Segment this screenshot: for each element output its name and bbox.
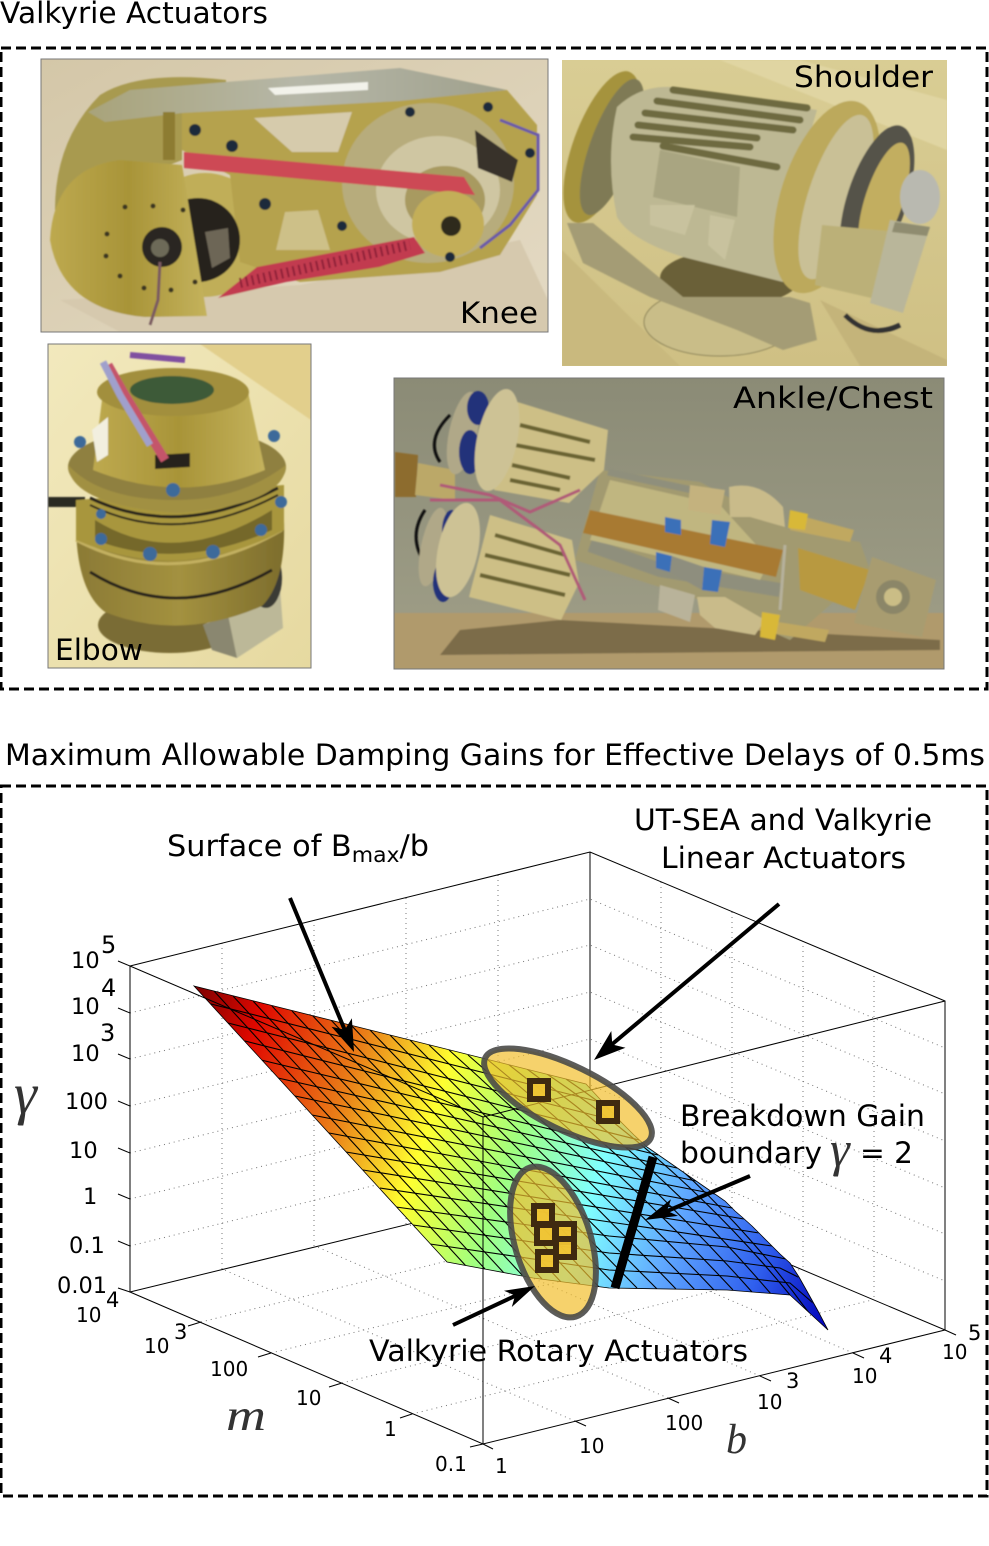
arrow: surface bbox=[290, 898, 354, 1052]
axis labels: gamma ticks: 10 bbox=[69, 1138, 98, 1164]
axis labels: m ticks bbox=[76, 1288, 467, 1476]
chart axes box: front edges bbox=[130, 966, 945, 1444]
label: Breakdown Gain boundary: boundary bbox=[680, 1136, 822, 1170]
breakdown gain boundary line bbox=[615, 1157, 653, 1288]
axis labels: m ticks: 0.1 bbox=[435, 1452, 467, 1476]
axis labels: b ticks: 10 bbox=[579, 1434, 604, 1458]
label: UT-SEA and Valkyrie Linear Actuators: Linear Actuators bbox=[661, 841, 906, 875]
axis labels: b ticks: 100 bbox=[665, 1411, 703, 1435]
label: Elbow: Elbow bbox=[55, 633, 143, 667]
axis labels: gamma ticks: 10 bbox=[71, 994, 100, 1020]
axis labels: m ticks: 10 bbox=[76, 1303, 101, 1327]
label: Valkyrie Rotary Actuators: Valkyrie Rotary Actuators bbox=[369, 1334, 748, 1368]
label: UT-SEA and Valkyrie Linear Actuators bbox=[634, 803, 932, 875]
label: Breakdown Gain boundary: Breakdown Gain bbox=[680, 1099, 925, 1133]
axis labels: m ticks: 100 bbox=[210, 1357, 248, 1381]
label: UT-SEA and Valkyrie Linear Actuators: UT-SEA and Valkyrie bbox=[634, 803, 932, 837]
photo: shoulder actuator bbox=[547, 60, 947, 366]
axis labels: gamma ticks: 1 bbox=[83, 1184, 97, 1210]
label: Shoulder: Shoulder bbox=[794, 60, 933, 94]
axis labels: gamma ticks: 4 bbox=[101, 974, 116, 1002]
photo frame: elbow bbox=[48, 344, 311, 668]
axis labels: b ticks bbox=[495, 1321, 981, 1478]
photo frame: ankle bbox=[394, 378, 944, 669]
axis labels: m ticks: 10 bbox=[296, 1386, 321, 1410]
photo: elbow actuator bbox=[48, 344, 311, 668]
chart gridlines bbox=[130, 875, 945, 1421]
axis labels: b ticks: 5 bbox=[968, 1321, 981, 1345]
heading: Maximum Allowable Damping Gains: Maximum Allowable Damping Gains for Effective Delays of 0.5ms bbox=[5, 738, 985, 772]
arrow: breakdown boundary bbox=[645, 1176, 750, 1220]
label: Breakdown Gain boundary: = 2 bbox=[860, 1136, 913, 1170]
axis labels: m ticks: 1 bbox=[384, 1417, 397, 1441]
axis title: m: m bbox=[226, 1391, 266, 1440]
data markers: linear actuators bbox=[530, 1081, 617, 1121]
axis labels: gamma ticks: 100 bbox=[65, 1089, 108, 1115]
photo: ankle and chest actuators bbox=[394, 378, 944, 669]
data markers: rotary actuators bbox=[534, 1206, 574, 1270]
chart axes box: back edges bbox=[118, 852, 956, 1449]
axis labels: m ticks: 4 bbox=[106, 1288, 119, 1312]
axis labels: b ticks: 3 bbox=[786, 1369, 799, 1393]
axis labels: b ticks: 10 bbox=[757, 1390, 782, 1414]
axis labels: m ticks: 3 bbox=[174, 1320, 187, 1344]
arrow: linear actuators bbox=[594, 904, 779, 1060]
label: surface of Bmax/b: Surface of B bbox=[167, 829, 344, 863]
label: Breakdown Gain boundary bbox=[680, 1099, 925, 1177]
axis labels: b ticks: 10 bbox=[852, 1364, 877, 1388]
callout: Valkyrie rotary ellipse bbox=[494, 1156, 612, 1328]
axis title: b: b bbox=[726, 1417, 747, 1463]
label: Ankle/Chest: Ankle/Chest bbox=[733, 381, 933, 415]
axis labels: gamma ticks: 5 bbox=[101, 931, 116, 959]
surface of Bmax/b bbox=[194, 986, 828, 1330]
callout: UT-SEA and Valkyrie linear ellipse bbox=[471, 1029, 665, 1167]
label: surface of Bmax/b: max bbox=[352, 843, 400, 867]
axis title: gamma: γ bbox=[14, 1061, 39, 1126]
axis labels: gamma ticks: 0.1 bbox=[69, 1233, 105, 1259]
axis labels: b ticks: 10 bbox=[942, 1340, 967, 1364]
axis labels: gamma ticks: 3 bbox=[100, 1019, 115, 1047]
photo frame: knee bbox=[41, 59, 548, 332]
label: Breakdown Gain boundary: γ bbox=[830, 1121, 851, 1177]
axis labels: b ticks: 1 bbox=[495, 1454, 508, 1478]
axis labels: m ticks: 10 bbox=[144, 1334, 169, 1358]
arrow: rotary actuators bbox=[453, 1286, 535, 1325]
photo: knee actuator bbox=[41, 59, 548, 332]
label: Knee: Knee bbox=[460, 296, 538, 330]
axis labels: gamma ticks: 10 bbox=[71, 1041, 100, 1067]
panel: 3D surface chart bbox=[1, 786, 987, 1496]
axis labels: gamma ticks bbox=[57, 931, 116, 1299]
axis labels: b ticks: 4 bbox=[879, 1344, 892, 1368]
panel: actuator photographs bbox=[1, 48, 987, 689]
axis labels: gamma ticks: 10 bbox=[71, 948, 100, 974]
axis labels: gamma ticks: 0.01 bbox=[57, 1273, 107, 1299]
label: surface of Bmax/b: /b bbox=[400, 829, 429, 863]
